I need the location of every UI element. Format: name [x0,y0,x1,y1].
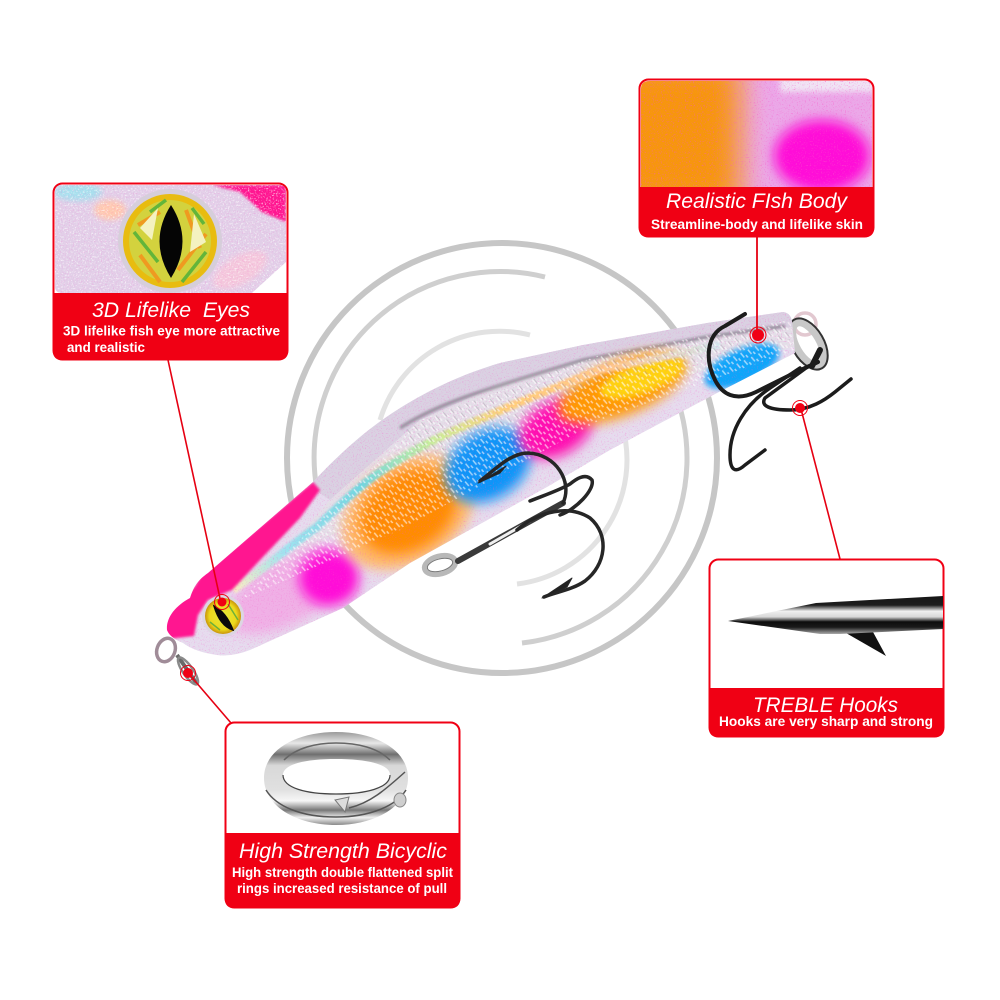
upper flank silver band [250,326,800,590]
caption bar [53,293,288,360]
callout line: eyes [168,360,230,610]
close-up of fish skin [641,81,872,187]
panel: realistic fish body [638,78,874,238]
panel: 3D lifelike eyes [53,183,288,360]
mid treble hook [458,453,603,598]
description: High strength double flattened split [232,865,453,880]
magenta patch [509,388,601,468]
magenta spot near head [299,550,359,606]
description: Hooks are very sharp and strong [719,714,933,729]
pink head [160,482,320,640]
heading: Realistic FIsh Body [666,189,848,213]
belly speckle [168,312,794,656]
close-up of lure eye [54,183,286,297]
caption bar [709,688,944,737]
callout line: body [750,237,766,343]
description line 2: rings increased resistance of pull [237,881,447,896]
caption bar [639,187,874,237]
blue patch [435,418,540,513]
rear treble hook [709,314,851,470]
callout line: hooks [792,400,840,559]
split ring image [264,732,408,825]
heading: High Strength Bicyclic [239,839,447,863]
description: Streamline-body and lifelike skin [651,217,863,232]
heading: TREBLE Hooks [753,693,898,717]
blue tail patch [700,339,784,393]
icon: lure eye [202,595,244,637]
lure front treble hook eye ring [422,552,458,578]
dorsal lilac band [300,305,800,500]
orange halo [334,446,480,578]
lure rear split rings [780,312,836,376]
lure front split ring [153,636,201,687]
panel: treble hooks [709,560,944,737]
concentric sonar rings [287,243,717,673]
panel: high strength bicyclic [225,722,460,908]
caption bar [225,833,460,908]
callout line: split ring [180,666,231,723]
description: 3D lifelike fish eye more attractive [63,324,280,338]
orange patch [352,460,463,562]
fish lure body [166,312,795,656]
heading: 3D Lifelike Eyes [92,298,250,322]
scale texture [240,320,795,600]
yellow orange patch [550,342,695,434]
iridescent lateral line [233,345,720,590]
description line 2: and realistic [67,340,145,355]
dark dorsal line [400,326,785,428]
close-up of hook point [728,596,943,656]
soft pink dust near head [230,540,351,640]
